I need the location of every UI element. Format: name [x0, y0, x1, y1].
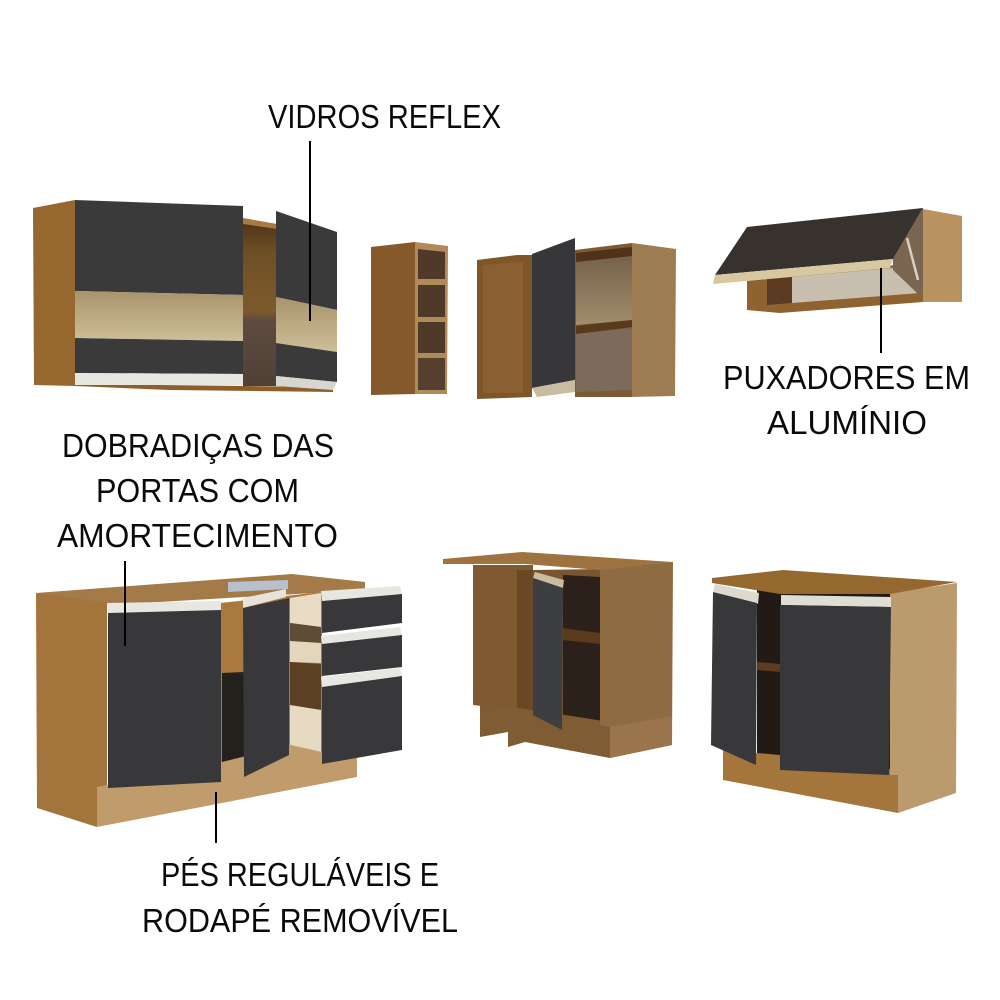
label: dobradicas: PORTAS COM	[96, 472, 299, 509]
middle drawer	[321, 627, 402, 676]
label: vidros reflex: VIDROS REFLEX	[268, 98, 501, 135]
label: dobradicas: DOBRADIÇAS DAS	[62, 427, 334, 464]
label: pes regulaveis: PÉS REGULÁVEIS E	[161, 856, 439, 893]
top drawer	[321, 586, 402, 633]
label: pes regulaveis	[142, 792, 458, 939]
left open door	[711, 584, 759, 765]
label: dobradicas	[57, 427, 338, 646]
open middle door	[243, 589, 289, 777]
label: puxadores em aluminio	[723, 268, 970, 441]
label: puxadores em aluminio: PUXADORES EM	[723, 359, 970, 396]
label: dobradicas: AMORTECIMENTO	[57, 517, 338, 554]
corner base cabinet	[443, 552, 673, 758]
label: pes regulaveis: RODAPÉ REMOVÍVEL	[142, 902, 458, 939]
base cabinet with drawers	[36, 574, 402, 827]
left glass door	[75, 200, 243, 385]
open corner door	[533, 572, 564, 730]
corner wall cabinet	[477, 238, 676, 399]
right door	[780, 595, 891, 775]
narrow open shelf unit	[371, 242, 448, 395]
wall cabinet with glass doors	[33, 200, 337, 392]
bottom drawer	[321, 668, 402, 764]
raised flap door	[713, 208, 923, 284]
label: puxadores em aluminio: ALUMÍNIO	[767, 404, 927, 441]
open door	[532, 238, 575, 397]
lift-up wall cabinet	[713, 208, 962, 313]
base cabinet two doors	[711, 570, 957, 813]
left door	[107, 601, 221, 788]
right glass door	[276, 211, 337, 390]
